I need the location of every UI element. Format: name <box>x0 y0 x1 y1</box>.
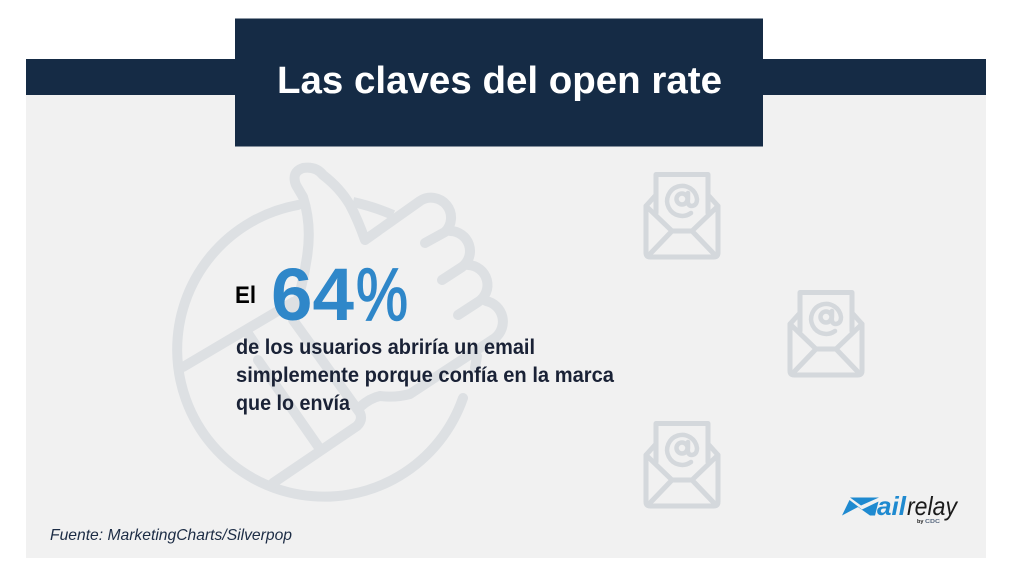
big number: 64%: 64 <box>271 253 354 336</box>
text block: statistic description <box>236 336 614 415</box>
title box <box>235 18 763 146</box>
icon: envelope top <box>646 174 718 257</box>
source note: Fuente: MarketingCharts/Silverpop <box>50 527 292 544</box>
text block: statistic description: de los usuarios abriría un email <box>236 336 535 359</box>
logo mark <box>842 498 879 516</box>
panel: background <box>26 95 986 558</box>
logo: Mailrelay by CDC: relay <box>907 491 959 521</box>
logo wordmark: ail <box>877 491 907 521</box>
text block: statistic description: que lo envía <box>236 392 350 415</box>
logo: Mailrelay by CDC <box>842 491 959 525</box>
header band <box>26 59 986 95</box>
icon: thumbs up in circle <box>177 168 503 497</box>
icon: envelope bottom <box>646 424 718 506</box>
logo byline: CDC <box>925 519 940 525</box>
logo byline <box>917 519 940 525</box>
title: Las claves del open rate <box>277 60 722 102</box>
text: El: El <box>235 282 256 309</box>
logo byline: by <box>917 519 924 525</box>
text block: statistic description: simplemente porque confía en la marca <box>236 364 614 387</box>
big number: 64% <box>271 253 408 336</box>
icon: envelope right <box>790 292 862 375</box>
big number: 64%: % <box>356 253 408 336</box>
